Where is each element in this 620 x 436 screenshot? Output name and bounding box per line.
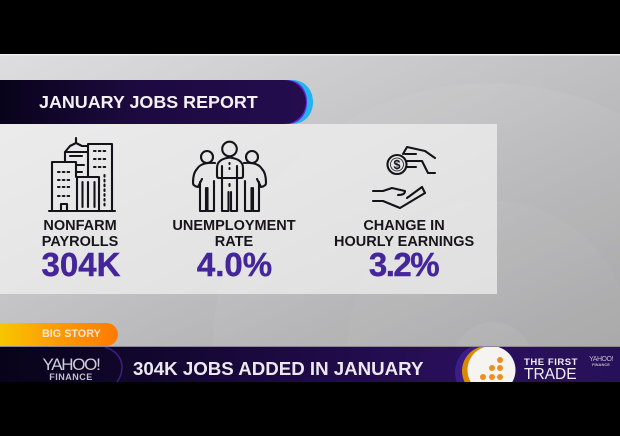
small yahoo finance logo: FINANCE xyxy=(592,362,610,367)
logo divider xyxy=(104,347,123,382)
yahoo finance logo xyxy=(42,356,100,382)
show name: TRADE xyxy=(524,366,577,382)
icon: three people xyxy=(192,140,268,212)
icon: hands with coin: $ xyxy=(394,158,401,172)
label: unemployment rate: RATE xyxy=(215,234,253,250)
label: unemployment rate: UNEMPLOYMENT xyxy=(172,218,296,234)
small yahoo finance logo xyxy=(589,356,613,367)
label: nonfarm payrolls: PAYROLLS xyxy=(42,234,118,250)
stats panel xyxy=(0,124,497,294)
title banner xyxy=(0,80,313,124)
show name xyxy=(524,358,578,382)
label: change in hourly earnings xyxy=(334,218,474,250)
label: nonfarm payrolls: NONFARM xyxy=(43,218,117,234)
banner bar xyxy=(0,80,306,124)
big story text: BIG STORY xyxy=(42,328,101,340)
label: nonfarm payrolls xyxy=(42,218,118,250)
big story tag xyxy=(0,323,118,346)
show logo badge xyxy=(455,347,516,382)
icon: hands with coin xyxy=(372,146,436,209)
icon: buildings xyxy=(48,137,116,212)
label: change in hourly earnings: CHANGE IN xyxy=(363,218,445,234)
value: 3.2%: 3.2% xyxy=(369,246,438,283)
value: 4.0%: 4.0% xyxy=(197,246,272,283)
value: 304K: 304K xyxy=(42,246,120,283)
label: change in hourly earnings: HOURLY EARNINGS xyxy=(334,234,474,250)
headline: 304K JOBS ADDED IN JANUARY xyxy=(133,358,423,379)
small yahoo finance logo: YAHOO! xyxy=(589,356,613,363)
yahoo finance logo: FINANCE xyxy=(49,372,93,382)
studio background xyxy=(0,54,620,346)
lower third bar xyxy=(0,346,620,382)
banner accent xyxy=(284,80,313,124)
banner title: JANUARY JOBS REPORT xyxy=(39,92,258,112)
label: unemployment rate xyxy=(172,218,296,250)
